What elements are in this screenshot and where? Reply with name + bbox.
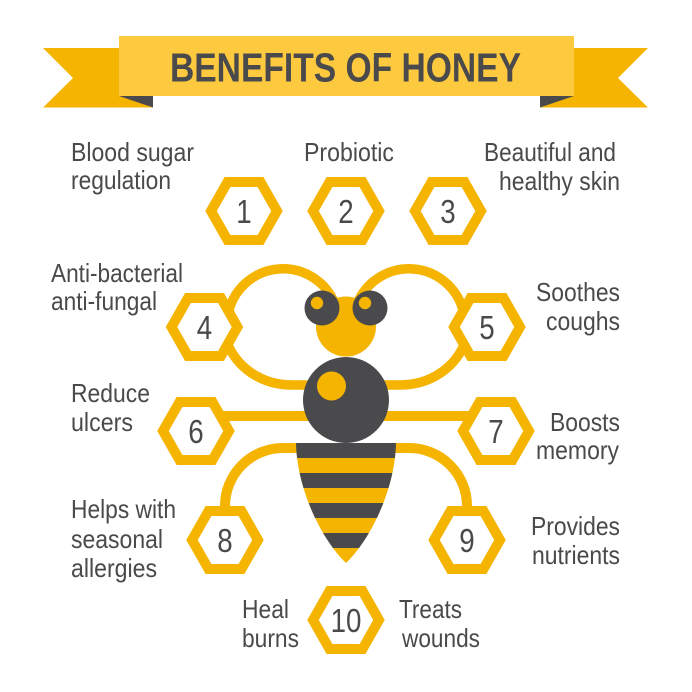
bee head: [316, 296, 376, 356]
wing upper left: [229, 269, 335, 310]
hexagon 4: [172, 298, 238, 356]
hexagon 1: [211, 182, 277, 240]
banner right tail: [540, 48, 648, 108]
hexagon 9: [434, 511, 500, 569]
banner: [43, 36, 648, 108]
label: anti-bacterial anti-fungal: anti-fungal: [51, 286, 157, 316]
label: boosts memory: memory: [536, 435, 619, 465]
label: beautiful and healthy skin: healthy skin: [499, 166, 620, 196]
label: boosts memory: Boosts: [550, 407, 620, 437]
hexagon 3: 3: [440, 194, 456, 231]
hexagon 8: [192, 511, 258, 569]
label: beautiful and healthy skin: [484, 137, 620, 196]
label: provides nutrients: nutrients: [532, 540, 620, 570]
hexagon 10: 10: [331, 603, 361, 640]
bee illustration: [205, 269, 487, 563]
wing lower left: [226, 340, 312, 385]
hexagon 5: [454, 298, 520, 356]
label: blood sugar regulation: regulation: [71, 165, 171, 195]
hexagon 4: 4: [197, 310, 212, 347]
label: boosts memory: [536, 407, 620, 465]
label: reduce ulcers: [71, 378, 150, 437]
label: treats wounds: wounds: [401, 623, 480, 653]
label: heal burns: burns: [242, 623, 299, 653]
hexagon 1: 1: [236, 194, 252, 231]
bee thorax: [303, 357, 389, 443]
banner right fold: [540, 96, 574, 108]
label: anti-bacterial anti-fungal: [51, 258, 183, 316]
hexagon 5: 5: [479, 310, 495, 347]
wing upper right: [357, 269, 463, 310]
hexagon 2: 2: [338, 194, 354, 231]
hexagon 9: 9: [459, 523, 475, 560]
hexagon 10: [313, 591, 379, 649]
label: treats wounds: [399, 594, 480, 653]
leg lower left: [225, 448, 300, 515]
label: heal burns: Heal: [242, 594, 289, 624]
label: helps with seasonal allergies: [71, 494, 176, 583]
banner left fold: [119, 96, 153, 108]
label: helps with seasonal allergies: Helps with: [71, 494, 176, 524]
hexagon 3: [415, 182, 481, 240]
hexagon 6: 6: [188, 414, 204, 451]
label: anti-bacterial anti-fungal: Anti-bacterial: [51, 258, 183, 288]
hexagon 2: [313, 182, 379, 240]
label: reduce ulcers: ulcers: [71, 407, 133, 437]
banner left tail: [43, 48, 153, 108]
label: heal burns: [242, 594, 299, 653]
label: treats wounds: Treats: [399, 594, 462, 624]
label: probiotic: Probiotic: [304, 137, 394, 167]
label: helps with seasonal allergies: allergies: [71, 553, 157, 583]
bee abdomen: [296, 443, 396, 563]
label: reduce ulcers: Reduce: [71, 378, 150, 408]
label: provides nutrients: Provides: [531, 511, 620, 541]
wing lower right: [380, 340, 466, 385]
label: blood sugar regulation: Blood sugar: [71, 137, 194, 167]
hexagon 8: 8: [217, 523, 233, 560]
label: helps with seasonal allergies: seasonal: [71, 524, 163, 554]
bee eye right: [352, 290, 388, 326]
leg lower right: [392, 448, 467, 515]
label: blood sugar regulation: [71, 137, 194, 195]
banner main band: [119, 36, 574, 96]
hexagon 6: [163, 402, 229, 460]
title: BENEFITS OF HONEY: [170, 44, 521, 90]
label: beautiful and healthy skin: Beautiful and: [484, 137, 616, 167]
leg left middle: [205, 411, 310, 421]
bee eye left: [304, 290, 340, 326]
leg right middle: [382, 411, 487, 421]
label: provides nutrients: [531, 511, 620, 570]
label: soothes coughs: coughs: [546, 306, 620, 336]
label: soothes coughs: [536, 277, 620, 336]
label: soothes coughs: Soothes: [536, 277, 620, 307]
hexagon 7: 7: [488, 414, 504, 451]
hexagon 7: [463, 402, 529, 460]
